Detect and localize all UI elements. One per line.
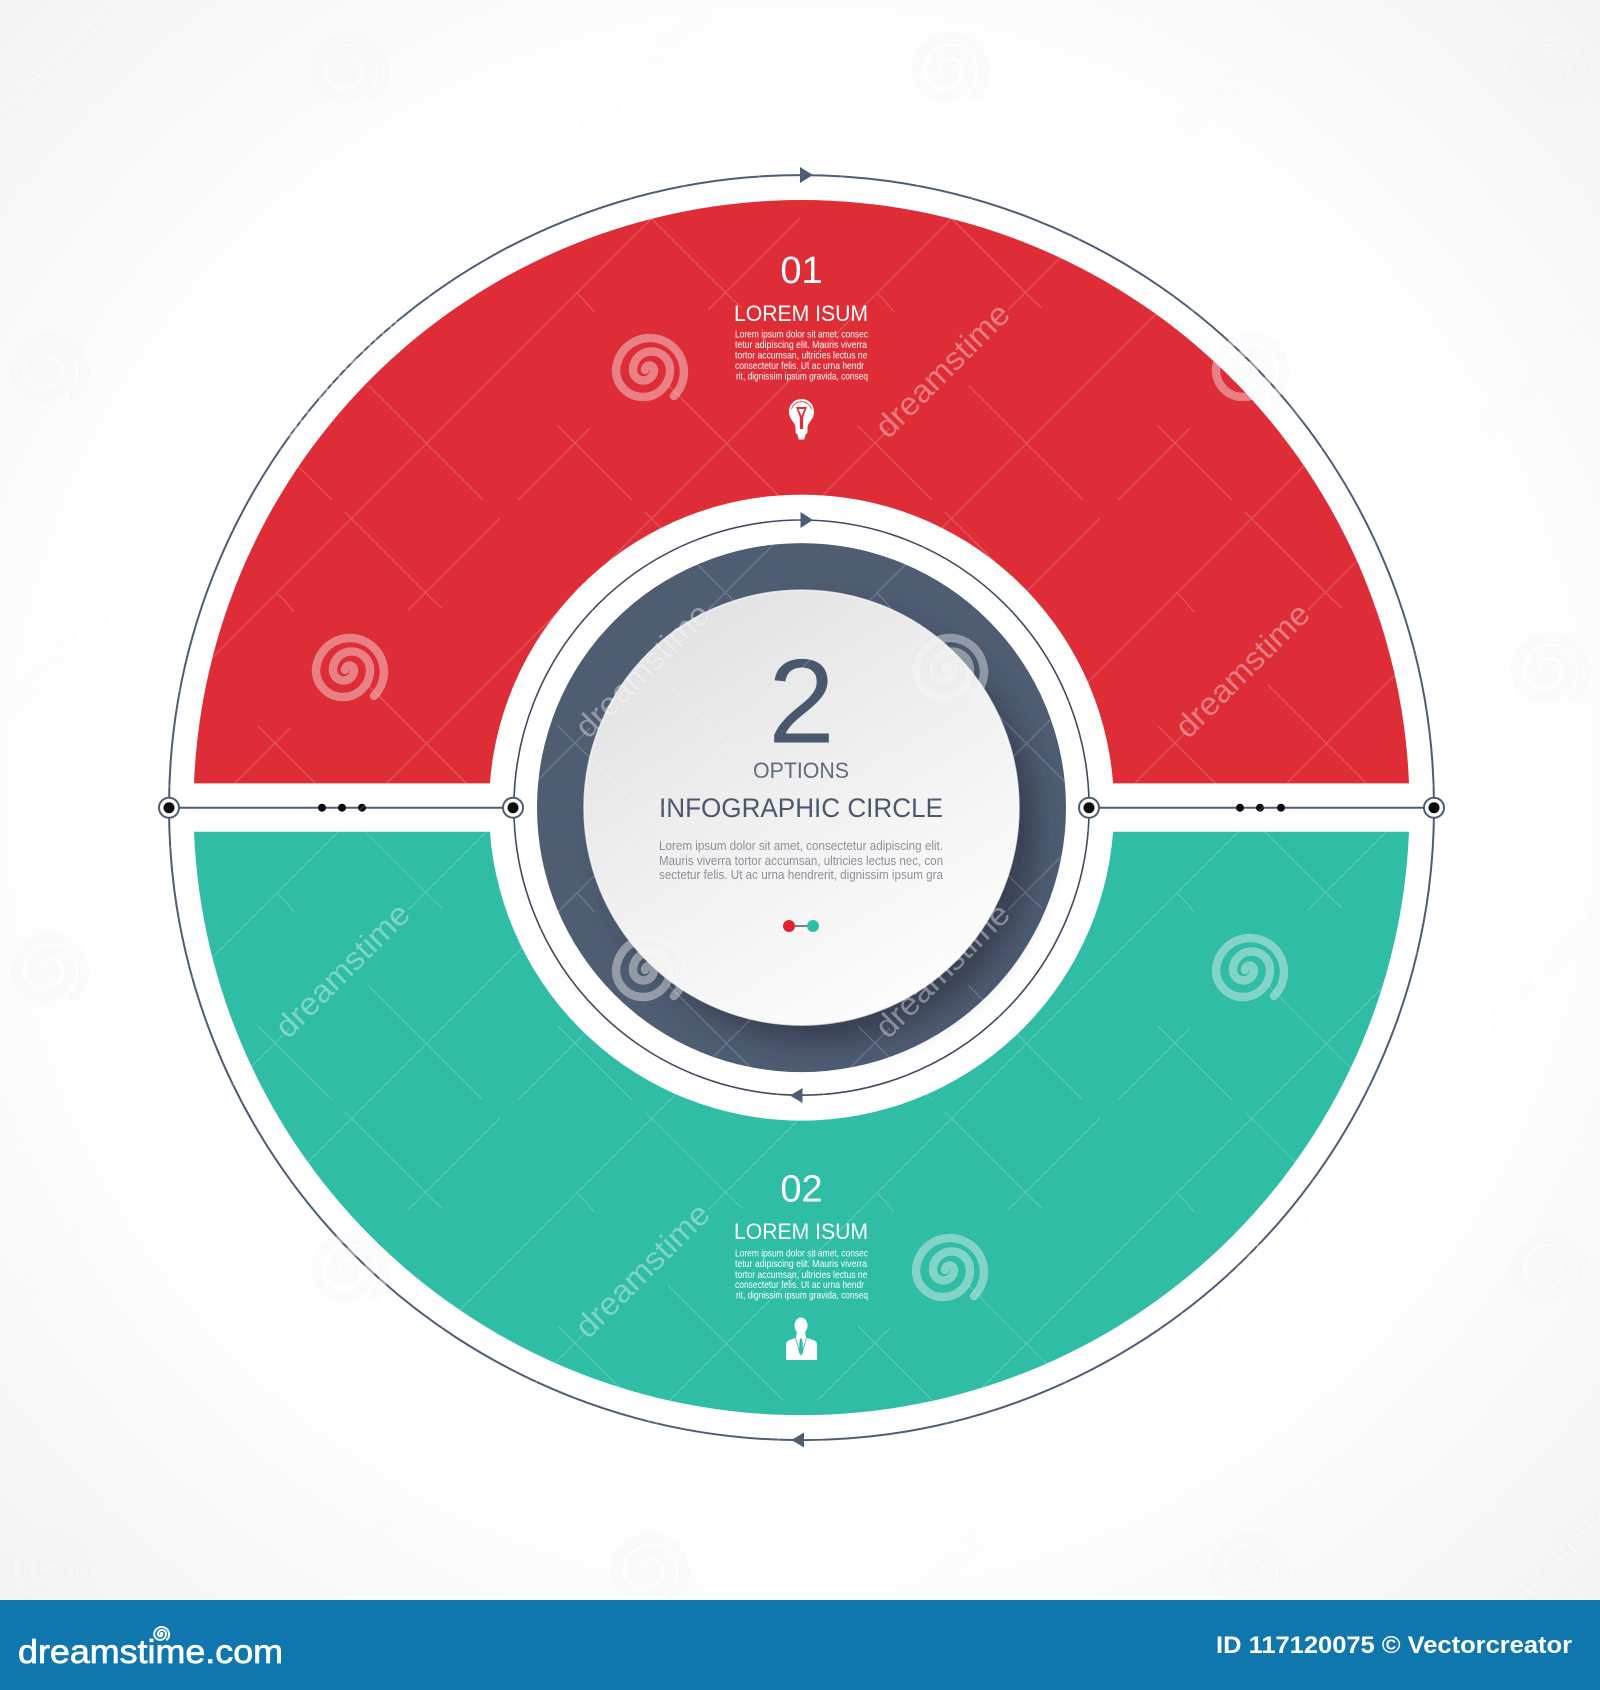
body 01: Lorem ipsum dolor sit amet, consec [735, 329, 868, 341]
centre text block [659, 634, 944, 882]
watermark: dreamstime text: dreamstime [1168, 596, 1317, 745]
body 02: rit, dignissim ipsum gravida, conseq [736, 1290, 868, 1302]
watermark: dreamstime text: dreamstime [568, 0, 717, 145]
icon: two option dots [783, 920, 819, 932]
watermark: dreamstime text: dreamstime [868, 296, 1017, 445]
body 01 [735, 329, 868, 382]
options label: OPTIONS [753, 758, 849, 783]
footer credit: ID 117120075 © Vectorcreator [1216, 1632, 1572, 1659]
arrow: inner top [800, 512, 813, 528]
arrow: inner bottom [790, 1088, 802, 1103]
description [659, 838, 944, 882]
main heading: INFOGRAPHIC CIRCLE [659, 793, 943, 823]
disc shadow [605, 612, 1037, 1044]
outer ring with arrows [169, 167, 1434, 1448]
watermark: dreamstime text: dreamstime [868, 1496, 1017, 1645]
connector: right with nodes [1079, 798, 1444, 818]
arrow: outer top [800, 167, 813, 183]
panel: green segment 02 [194, 832, 1409, 1415]
body 02: consectetur felis. Ut ac urna hendr [735, 1279, 864, 1291]
inner ring with arrows [514, 512, 1089, 1103]
watermark: dreamstime text: dreamstime [1168, 1196, 1317, 1345]
body 01: tetur adipiscing elit. Mauris viverra [735, 339, 867, 351]
footer logo spiral [154, 1627, 169, 1640]
centre disc [584, 590, 1019, 1025]
watermark: dreamstime text: dreamstime [268, 896, 417, 1045]
icon: business person [786, 1318, 817, 1360]
body 02 [735, 1248, 868, 1302]
segment text: 02 [734, 1169, 868, 1302]
segment text: 01 [734, 250, 868, 382]
connector: left with nodes [159, 798, 523, 818]
watermark: dreamstime text: dreamstime [268, 1496, 417, 1645]
watermark: dreamstime text: dreamstime [868, 896, 1017, 1045]
dark ring [537, 543, 1066, 1072]
watermark: dreamstime text: dreamstime [568, 1196, 717, 1345]
title 01: LOREM ISUM [734, 301, 868, 326]
panel: red segment 01 [194, 200, 1409, 783]
description: Mauris viverra tortor accumsan, ultricies lectus nec, con [659, 853, 943, 868]
big number: 2 [768, 634, 835, 768]
footer logo: dreamstime.com [18, 1633, 283, 1670]
body 01: rit, dignissim ipsum gravida, conseq [736, 370, 868, 382]
title 02: LOREM ISUM [734, 1219, 868, 1244]
body 01: consectetur felis. Ut ac urna hendr [735, 360, 864, 372]
body 01: tortor accumsan, ultricies lectus ne [735, 350, 868, 362]
body 02: Lorem ipsum dolor sit amet, consec [735, 1248, 868, 1260]
description: Lorem ipsum dolor sit amet, consectetur adipiscing elit. [659, 838, 943, 853]
number 01: 01 [780, 250, 823, 292]
arrow: outer bottom [792, 1432, 804, 1448]
footer bar [0, 1600, 1600, 1690]
body 02: tetur adipiscing elit. Mauris viverra [735, 1258, 867, 1270]
watermark: dreamstime text: dreamstime [1168, 0, 1317, 145]
watermark: dreamstime text: dreamstime [268, 296, 417, 445]
icon: light bulb [789, 399, 814, 439]
body 02: tortor accumsan, ultricies lectus ne [735, 1269, 868, 1281]
watermark: dreamstime text: dreamstime [568, 596, 717, 745]
number 02: 02 [780, 1169, 823, 1211]
description: sectetur felis. Ut ac urna hendrerit, dignissim ipsum gra [659, 867, 944, 882]
